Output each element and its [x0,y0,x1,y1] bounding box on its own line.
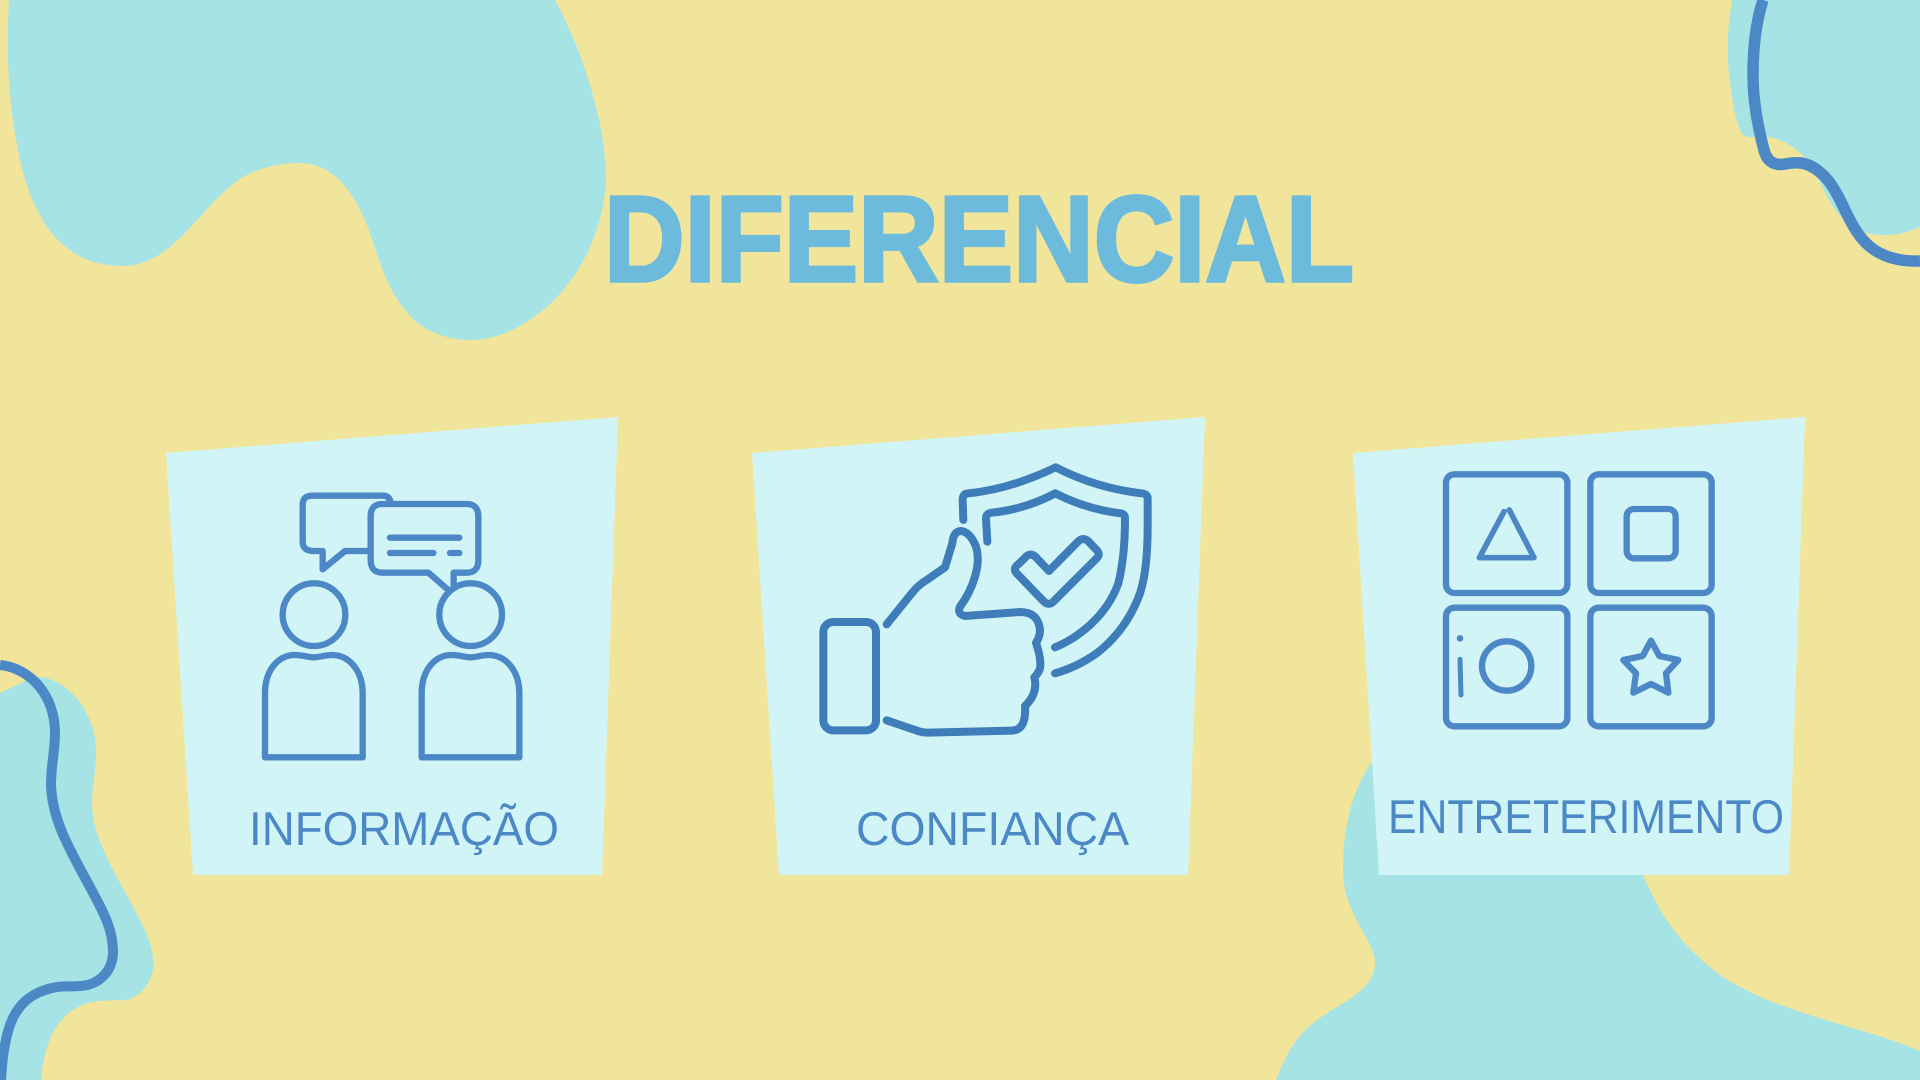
title: DIFERENCIAL [604,171,1354,307]
blob: bottom right [1276,759,1920,1080]
panel: informação [166,417,618,875]
icon: two people talking [265,496,519,757]
panel background: entreterimento [1353,417,1805,875]
blob: top left [8,0,606,340]
icon: thumbs up and shield [823,467,1148,733]
icon: four shape tiles [1446,474,1712,726]
panel: entreterimento [1353,417,1805,875]
wavy line: bottom left [0,665,113,1080]
blob: bottom left [0,677,153,1080]
blob: top right [1728,0,1920,235]
label: informação: INFORMAÇÃO [249,803,559,856]
panel: confiança [752,417,1205,875]
label: confiança: CONFIANÇA [856,803,1129,856]
wavy line: top right [1753,0,1920,261]
label: entreterimento: ENTRETERIMENTO [1388,791,1784,844]
panel background: informação [166,417,618,875]
panel background: confiança [752,417,1205,875]
